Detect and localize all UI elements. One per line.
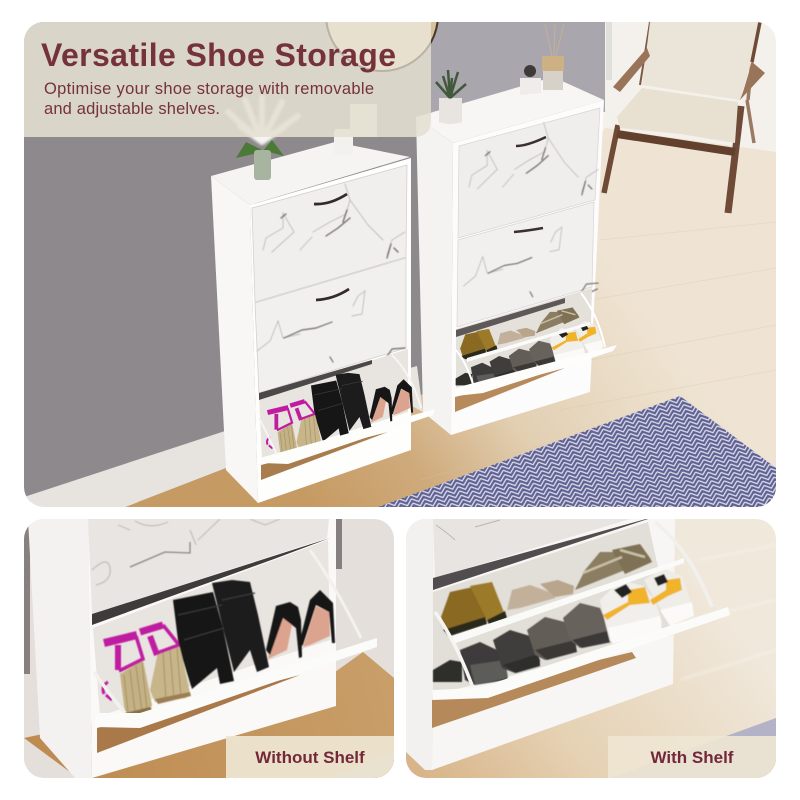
shoes	[267, 373, 413, 459]
plant pot	[436, 70, 466, 124]
chair seat cushion	[617, 88, 738, 143]
floor planks	[420, 222, 776, 480]
door	[433, 519, 630, 578]
interior	[433, 522, 673, 695]
wood opening	[432, 652, 636, 728]
subtitle: and adjustable shelves.	[44, 100, 220, 118]
floor	[406, 519, 776, 778]
background wall	[24, 519, 394, 778]
handles	[314, 194, 349, 300]
dark gap	[433, 519, 648, 590]
top	[416, 77, 604, 143]
opening	[261, 432, 388, 480]
baseboard between cabinets	[410, 366, 423, 412]
flap hinge left	[94, 672, 125, 713]
side	[211, 176, 258, 503]
cabinet front	[432, 519, 675, 770]
door 2	[457, 202, 594, 327]
cabinet 2	[416, 77, 617, 435]
top	[211, 142, 410, 205]
dark gap	[456, 298, 565, 337]
label panel: With Shelf	[651, 748, 734, 767]
panel: with shelf	[406, 519, 776, 778]
mirror	[431, 22, 438, 44]
side	[416, 117, 453, 435]
panel: main room photo	[24, 0, 776, 507]
shoes group	[433, 544, 694, 685]
rug corner	[610, 718, 776, 778]
title panel	[24, 0, 438, 137]
marble door 1	[263, 184, 405, 258]
window frame	[606, 22, 612, 80]
light rear wall	[431, 22, 605, 112]
front	[250, 158, 411, 503]
wood opening	[97, 675, 300, 753]
front	[451, 100, 604, 435]
door 2	[255, 258, 406, 393]
flap	[95, 638, 377, 728]
floor highlights	[680, 545, 776, 680]
shoes group	[103, 580, 335, 716]
cabinet 1	[211, 142, 435, 503]
label panel	[226, 736, 394, 778]
flap	[455, 345, 617, 396]
diffuser box	[350, 104, 377, 137]
hinge left	[435, 612, 472, 685]
rug	[378, 396, 776, 507]
chair arms	[613, 48, 765, 100]
mirror reflection	[326, 0, 438, 71]
cabinet body	[406, 519, 433, 770]
flap hinge right	[310, 550, 361, 638]
diffuser and bottle	[520, 24, 564, 95]
floor	[125, 128, 776, 507]
flap	[260, 409, 435, 464]
handles	[514, 137, 546, 232]
panel: without shelf	[24, 519, 394, 778]
dark gap	[259, 360, 372, 400]
heading: Versatile Shoe Storage	[41, 37, 396, 73]
hinge right	[655, 522, 712, 607]
marble door 2	[464, 227, 598, 297]
flap	[432, 607, 730, 700]
rug corner	[330, 752, 394, 778]
hinges	[456, 293, 605, 388]
panel background	[24, 22, 431, 137]
vase and lilies	[228, 98, 298, 180]
wall strip right	[330, 519, 342, 569]
floor	[24, 652, 394, 778]
right room background	[600, 22, 776, 162]
door	[88, 519, 329, 614]
baseboard	[24, 431, 226, 507]
marble door 1	[469, 122, 598, 195]
hinges	[259, 355, 421, 455]
opening	[455, 368, 565, 412]
dark gap	[92, 538, 330, 625]
marble veins	[92, 519, 280, 585]
subtitle: Optimise your shoe storage with removable	[44, 80, 374, 98]
chair back cushion	[642, 22, 760, 100]
wall	[24, 22, 614, 502]
cabinet body	[28, 519, 92, 778]
shoes	[456, 307, 603, 387]
door 1	[252, 165, 407, 302]
marble door 2	[257, 291, 405, 362]
shelf	[452, 558, 684, 644]
interior	[93, 540, 330, 716]
candle	[334, 129, 353, 155]
wall strip left	[24, 519, 30, 674]
label panel	[608, 736, 776, 778]
label panel: Without Shelf	[255, 748, 365, 767]
door 1	[458, 108, 600, 238]
chair legs and frame	[604, 125, 618, 193]
shelf	[467, 322, 590, 362]
interior	[456, 288, 592, 392]
interior	[259, 349, 408, 460]
chair	[604, 22, 765, 213]
marble veins	[436, 520, 500, 540]
cabinet front	[88, 519, 336, 778]
